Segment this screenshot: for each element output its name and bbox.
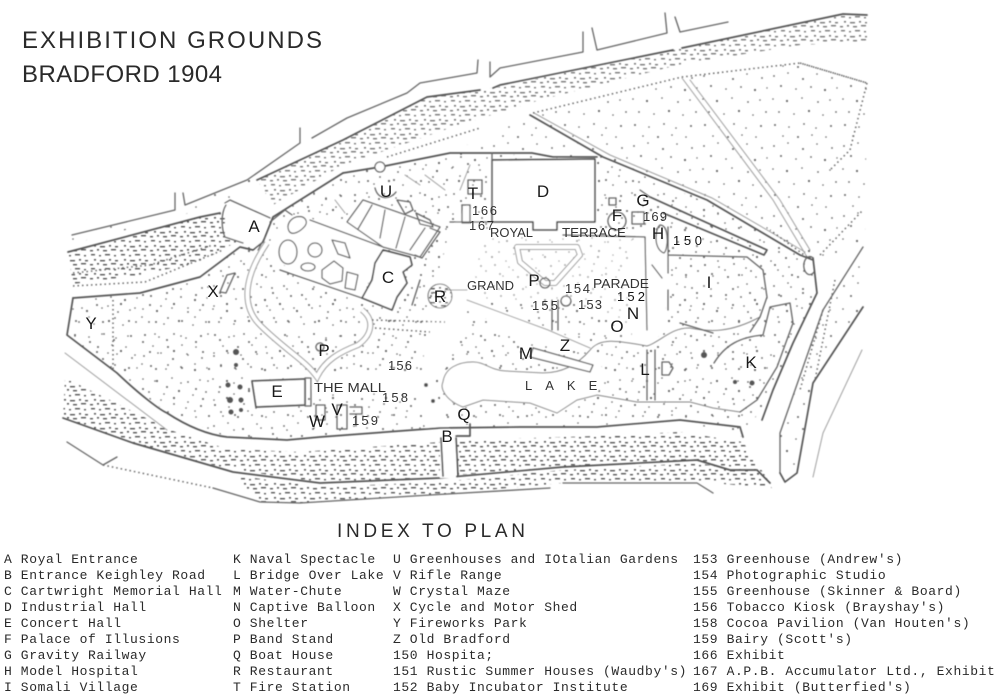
index column 1: C Cartwright Memorial Hall [4,584,222,599]
index column 1: E Concert Hall [4,616,122,631]
main roads [73,173,343,298]
index column 1: G Gravity Railway [4,648,147,663]
winding park paths [247,243,370,377]
label V: V [331,400,343,419]
index column 3: U Greenhouses and IOtalian Gardens [393,552,679,567]
label F: F [612,206,622,225]
label 169: 169 [643,209,667,224]
title: BRADFORD 1904 [22,61,222,88]
index column 2 [233,552,384,695]
index column 1: D Industrial Hall [4,600,147,615]
index column 2: O Shelter [233,616,309,631]
bridge hut [662,362,673,375]
label Z: Z [560,336,570,355]
label X: X [207,282,219,301]
east boundary and strip [762,258,817,420]
italian gardens U [347,200,440,257]
diagonal avenues [530,115,813,260]
index column 3: 151 Rustic Summer Houses (Waudby's) [393,664,687,679]
map labels: names and numbers [314,203,702,428]
palace and hospital shapes [608,198,667,278]
label 154: 154 [565,281,590,296]
label K: K [745,353,757,372]
label I: I [707,273,711,292]
map labels: letters [85,182,757,446]
label H: H [652,224,664,243]
label N: N [627,304,639,323]
label 159: 159 [352,413,378,428]
label royal: ROYAL [490,225,533,240]
south boundary strip [63,378,770,483]
index column 4 [693,552,995,695]
tree avenue strip north [257,14,867,205]
index column 2: L Bridge Over Lake [233,568,384,583]
verge west [68,213,240,284]
concert hall E [252,379,305,407]
label A: A [248,217,260,236]
index column 4: 158 Cocoa Pavilion (Van Houten's) [693,616,970,631]
index column 4: 154 Photographic Studio [693,568,886,583]
east roads and enclosure [563,227,767,400]
label the mall: THE MALL [314,380,386,395]
label Q: Q [457,405,471,424]
lake shoreline [442,317,760,413]
denser central stipple [67,153,817,440]
label G: G [636,191,650,210]
index column 3: V Rifle Range [393,568,502,583]
index column 3: 150 Hospita; [393,648,494,663]
index heading: INDEX TO PLAN [337,521,525,542]
bridge entrance B [440,432,456,478]
index column 1: A Royal Entrance [4,552,138,567]
main park stipple [67,63,867,440]
label terrace: TERRACE [562,225,626,240]
index column 3 [393,552,687,695]
index column 4: 159 Bairy (Scott's) [693,632,853,647]
label 166: 166 [472,203,497,218]
kite area arc [714,303,793,412]
index column 3: 152 Baby Incubator Institute [393,680,628,695]
index column 1: F Palace of Illusions [4,632,180,647]
index column 4: 169 Exhibit (Butterfied's) [693,680,911,695]
label L: L [640,360,650,379]
index to plan [4,552,995,695]
index column 4: 167 A.P.B. Accumulator Ltd., Exhibit [693,664,995,679]
index column 3: Z Old Bradford [393,632,511,647]
label E: E [271,382,283,401]
north boundary of central grounds [343,153,597,173]
label 153: 153 [578,297,602,312]
index column 1 [4,552,222,695]
plaza and garden white grounds [225,157,668,430]
title [22,27,322,88]
strip along north road [68,180,257,245]
industrial hall [492,159,595,230]
label 156: 156 [388,358,412,373]
label 167: 167 [469,218,494,233]
index column 4: 156 Tobacco Kiosk (Brayshay's) [693,600,945,615]
tree clumps [226,349,754,414]
index column 4: 155 Greenhouse (Skinner & Board) [693,584,962,599]
label 150: 150 [673,233,702,248]
lake water [442,352,605,413]
grand parade edges [445,290,590,348]
label 158: 158 [382,390,408,405]
index column 2: M Water-Chute [233,584,342,599]
outer thin road lines [72,13,728,235]
fire station and small huts [462,180,482,223]
index column 2: R Restaurant [233,664,334,679]
index column 1: I Somali Village [4,680,138,695]
label D: D [537,182,549,201]
index column 2: Q Boat House [233,648,334,663]
label lake: LAKE [525,378,610,393]
label B: B [441,427,453,446]
index column 4: 166 Exhibit [693,648,785,663]
x shed [220,273,235,293]
label Y: Y [85,314,97,333]
index column 3: W Crystal Maze [393,584,511,599]
band stand triangle path [517,247,580,283]
label C: C [382,268,394,287]
water chute M [530,348,593,372]
garden blobs [288,217,306,233]
map base drawing [63,13,867,503]
east strip [780,247,863,473]
index column 2: K Naval Spectacle [233,552,376,567]
entrance plaza edges [222,200,292,250]
cartwright hall C [362,250,412,310]
label M: M [519,344,533,363]
strip below outer road [233,463,772,503]
index column 2: P Band Stand [233,632,334,647]
label P south: P [318,341,330,360]
index column 2: T Fire Station [233,680,351,695]
title: EXHIBITION GROUNDS [22,27,322,54]
label 155: 155 [532,298,558,313]
index column 4: 153 Greenhouse (Andrew's) [693,552,903,567]
index column 1: H Model Hospital [4,664,138,679]
label R: R [434,287,446,306]
restaurant stipple [428,284,452,308]
label U: U [380,182,392,201]
label grand: GRAND [467,278,514,293]
label W: W [309,412,325,431]
map: exhibition grounds plan [63,13,867,503]
index column 2: N Captive Balloon [233,600,376,615]
index column 1: B Entrance Keighley Road [4,568,206,583]
label parade: PARADE [593,276,649,291]
label P north: P [528,271,540,290]
label T: T [468,184,478,203]
gravity railway [650,197,767,255]
index column 3: X Cycle and Motor Shed [393,600,578,615]
label O: O [610,317,624,336]
index column 3: Y Fireworks Park [393,616,527,631]
label 152: 152 [617,289,645,304]
